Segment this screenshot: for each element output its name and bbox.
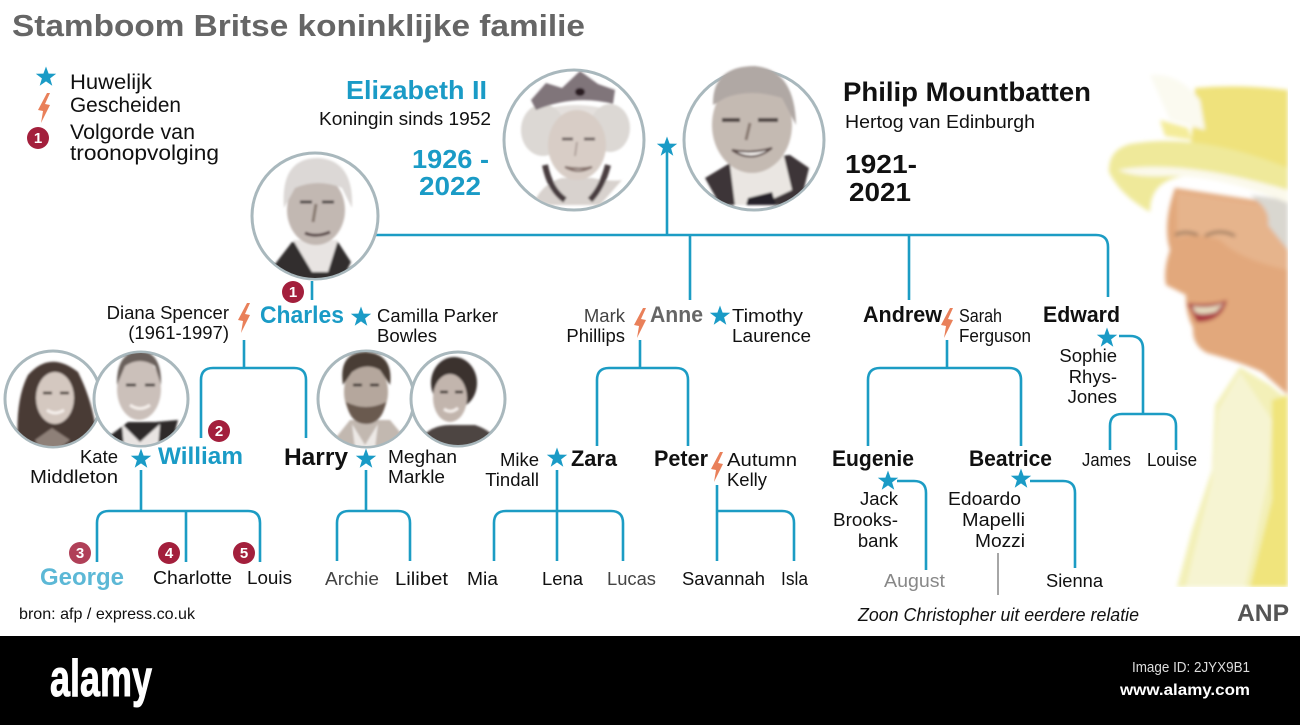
grandchildren row: Mia [467,568,499,589]
marriage star: Elizabeth and Philip [657,136,677,156]
Philip Mountbatten text: 1921- [845,149,917,179]
badge: 4 [158,542,180,564]
legend [27,66,219,165]
Philip Mountbatten text [843,77,1091,207]
William line: Kate [80,446,118,467]
William line: Middleton [30,466,118,487]
portrait: William [94,351,188,450]
Eugenie block: Jack [860,488,899,509]
Eugenie block: bank [858,530,899,551]
grandchildren row: Lucas [607,568,656,589]
badge: 1: 1 [289,284,297,301]
badge: 3: 3 [76,545,84,562]
Anne line: Timothy [732,305,804,326]
connector lines [97,150,1176,595]
badge: 4: 4 [165,545,174,562]
grandchildren row: Savannah [682,568,765,589]
badge: 2 [208,420,230,442]
Anne line: Phillips [566,325,625,346]
legend: Huwelijk [70,71,153,94]
grandchildren row: Isla [781,568,809,589]
logo: ANP: ANP [1237,600,1289,627]
Zara line: Tindall [485,469,539,490]
website: www.alamy.com [1119,682,1250,699]
grandchildren row: Charlotte [153,567,232,588]
icon: divorce Anne and Mark [634,308,646,338]
grandchildren row: Lilibet [395,568,448,589]
Andrew line: Ferguson [959,325,1031,346]
Harry line [284,444,457,487]
photo: Queen in yellow hat [1109,75,1288,587]
Philip Mountbatten text: Philip Mountbatten [843,77,1091,107]
Andrew line: Andrew [863,302,943,327]
badge: 2: 2 [215,423,223,440]
portrait: Harry [318,351,414,450]
Peter line: Kelly [727,469,768,490]
portrait: Kate Middleton [5,351,101,450]
grandchildren row: Archie [325,568,379,589]
Beatrice block: Beatrice [969,446,1052,471]
Edward block [1043,302,1197,470]
legend: Volgorde van [70,121,195,144]
Anne line: Laurence [732,325,811,346]
grandchildren row: Lena [542,568,584,589]
legend: troonopvolging [70,142,219,165]
icon: marriage Harry and Meghan [356,448,376,468]
icon: marriage Eugenie and Jack [878,470,898,490]
Charles line: Bowles [377,325,437,346]
Philip Mountbatten text: 2021 [849,177,911,207]
Charles line [107,281,498,346]
Harry line: Harry [284,444,349,471]
Beatrice block: Edoardo [948,488,1021,509]
grandchildren row: August [884,570,945,591]
Peter line: Autumn [727,449,797,470]
icon: divorce Charles and Diana [238,303,250,333]
Harry line: Markle [388,466,445,487]
Andrew line [863,302,1031,346]
Peter line [654,446,797,490]
icon: legend lightning [38,93,50,123]
Charles line: Diana Spencer [107,302,229,323]
badge: 1 [282,281,304,303]
legend: Gescheiden [70,94,181,117]
grandchildren row: Sienna [1046,570,1104,591]
icon: marriage Edward and Sophie [1097,328,1117,347]
Anne line: Anne [650,302,703,327]
Elizabeth II text: Koningin sinds 1952 [319,108,491,129]
Edward block: Sophie [1059,345,1117,366]
icon: marriage Zara and Mike [547,448,567,467]
icon: legend succession badge [27,127,49,149]
title: Stamboom Britse koninklijke familie [12,8,585,43]
Anne line: Mark [584,305,626,326]
Edward block: Edward [1043,302,1120,327]
icon: marriage Charles and Camilla [351,306,371,326]
Andrew line: Sarah [959,305,1002,326]
badge: 3 [69,542,91,564]
footnote: source: bron: afp / express.co.uk [19,606,196,623]
Harry line: Meghan [388,446,457,467]
badge: 5 [233,542,255,564]
Charles line: Charles [260,302,344,329]
Eugenie block: Eugenie [832,446,914,471]
icon: legend star [36,66,56,86]
Edward block: James [1082,449,1131,470]
Charles line: Camilla Parker [377,305,498,326]
logo: alamy: alamy [50,650,152,708]
Zara line: Zara [571,446,618,471]
grandchildren row [40,542,1104,591]
Peter line: Peter [654,446,708,471]
Elizabeth II text: 2022 [419,171,481,201]
William line: William [158,443,243,470]
badge: 5: 5 [240,545,248,562]
Beatrice block: Mapelli [962,509,1025,530]
William line [30,420,243,487]
icon: marriage Beatrice and Edoardo [1011,468,1031,488]
grandchildren row: Louis [247,567,292,588]
portrait: Philip Mountbatten [684,66,824,210]
icon: marriage William and Kate [131,448,151,468]
portrait: Meghan Markle [411,352,505,450]
Elizabeth II text [319,75,491,201]
icon: divorce Andrew and Sarah [941,308,953,338]
Edward block: Jones [1068,386,1117,407]
Edward block: Rhys- [1069,366,1117,387]
Beatrice block: Mozzi [975,530,1025,551]
icon: divorce Peter and Autumn [711,452,723,482]
Beatrice block [948,446,1052,551]
Edward block: Louise [1147,449,1197,470]
grandchildren row: George [40,564,124,591]
note: Zoon Christopher: Zoon Christopher uit eerdere relatie [857,605,1139,625]
image id: Image ID: 2JYX9B1 [1132,659,1250,676]
Anne line [566,302,811,346]
Zara line: Mike [500,449,539,470]
portrait: Elizabeth II [504,70,644,210]
footer bar: alamy [0,636,1300,725]
Elizabeth II text: Elizabeth II [346,75,487,105]
Zara line [485,446,618,490]
Philip Mountbatten text: Hertog van Edinburgh [845,111,1035,132]
Eugenie block: Brooks- [833,509,898,530]
Charles line: (1961-1997) [128,322,229,343]
icon: marriage Anne and Timothy [710,306,730,325]
Eugenie block [832,446,914,551]
portrait: Charles [252,153,378,285]
Elizabeth II text: 1926 - [412,144,489,174]
icon: legend succession badge: 1 [34,130,42,147]
